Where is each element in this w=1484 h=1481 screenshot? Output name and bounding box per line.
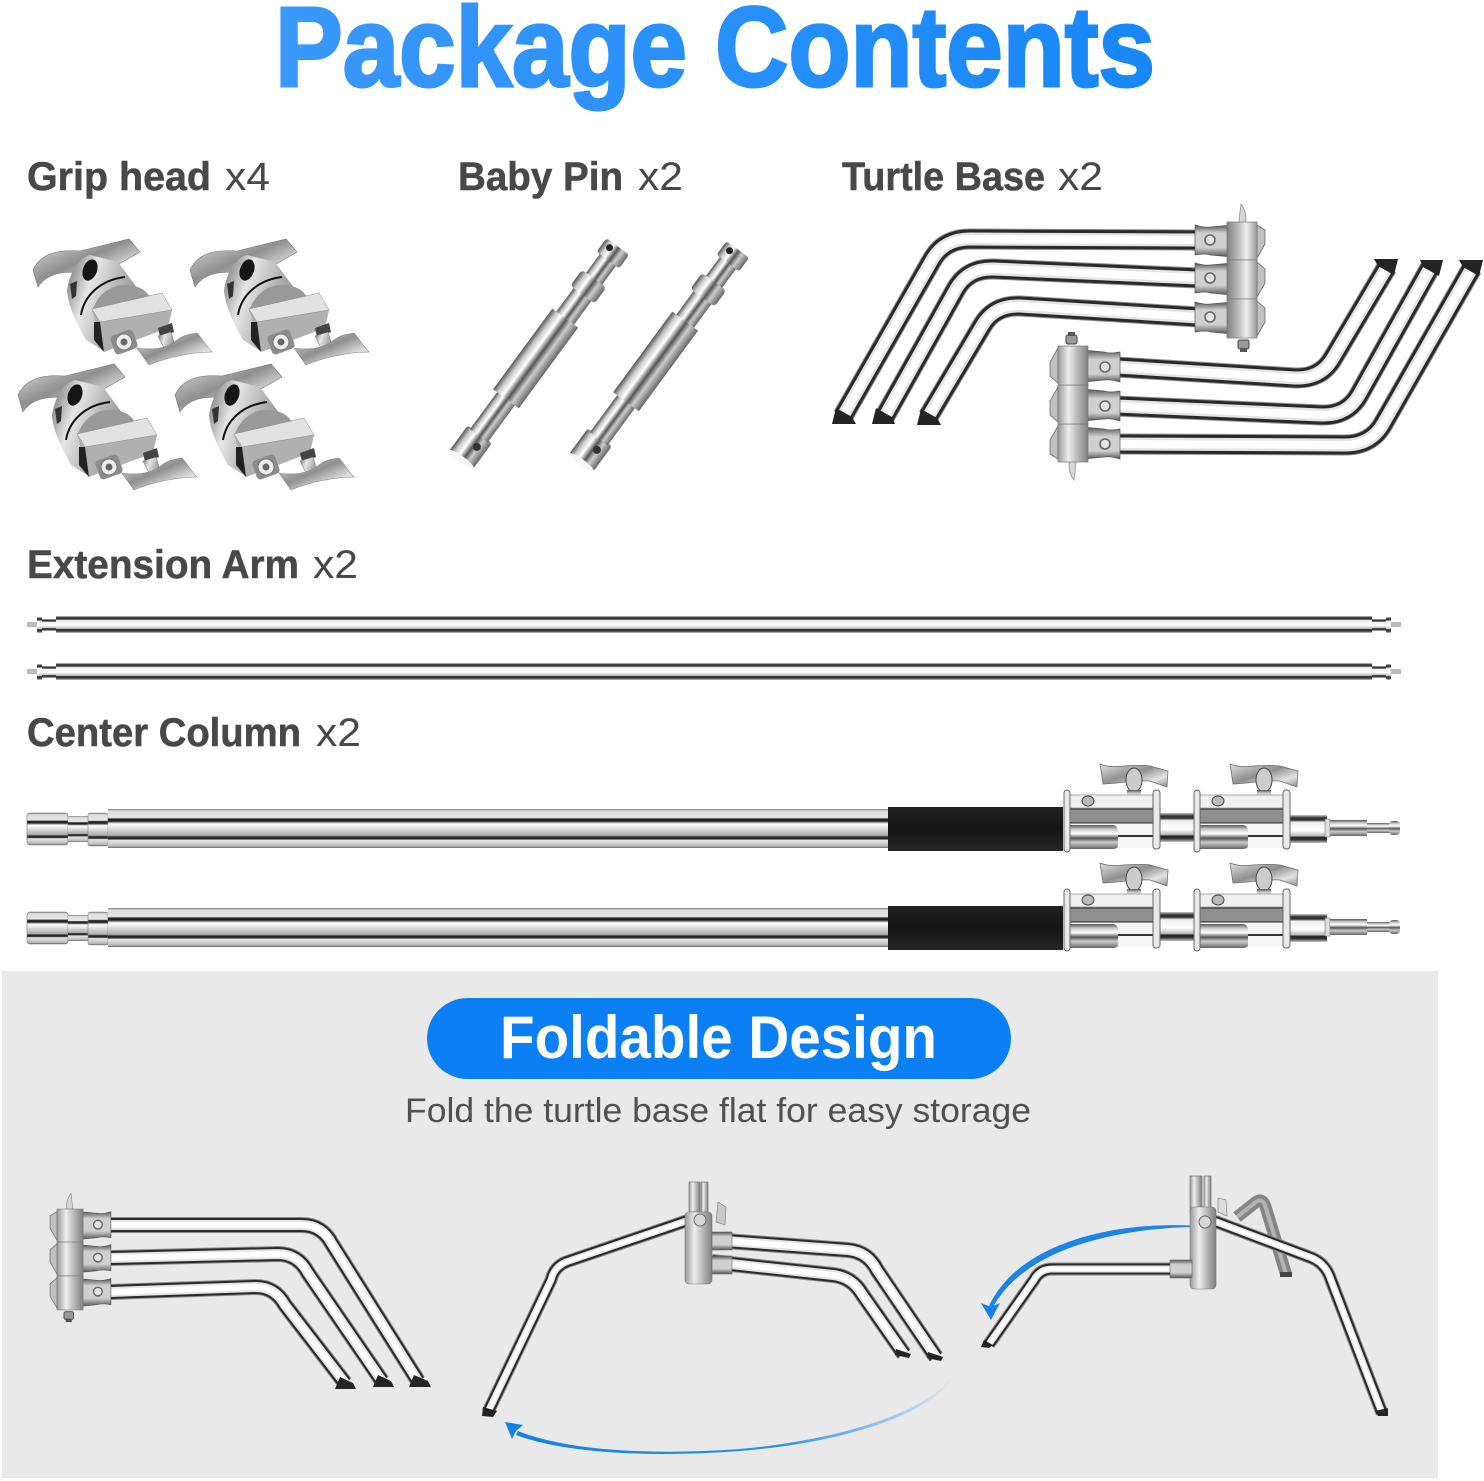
badge: foldable design: Foldable Design — [500, 1004, 937, 1071]
icon: stand with one leg being folded — [981, 1176, 1388, 1416]
heading: turtle base: Turtle Base — [842, 155, 1045, 199]
icon: baby pin 1 — [447, 237, 631, 471]
panel background — [2, 971, 1438, 1478]
icon: turtle base 1 — [832, 204, 1265, 425]
icon: grip head 1 — [33, 239, 212, 365]
heading: extension arm: Extension Arm — [27, 543, 299, 587]
heading: baby pin: x2 — [638, 155, 683, 199]
icon: grip head 3 — [18, 364, 197, 490]
icon: grip head 2 — [190, 239, 369, 365]
icon: folded turtle base — [50, 1193, 431, 1389]
heading: baby pin: Baby Pin — [458, 155, 623, 199]
heading: center column: Center Column — [27, 711, 301, 755]
heading: extension arm: x2 — [313, 543, 358, 587]
badge: foldable design — [427, 998, 1011, 1079]
icon: center column 2 — [27, 863, 1400, 951]
icon: grip head 4 — [175, 364, 354, 490]
heading: grip head: Grip head — [27, 155, 211, 199]
panel: foldable design — [2, 971, 1438, 1478]
icon: baby pin 2 — [567, 240, 751, 474]
icon: center column 1 — [27, 764, 1400, 852]
subtitle: Fold the turtle base flat for easy storage — [405, 1092, 1031, 1130]
icon: turtle base 2 — [1050, 259, 1483, 480]
heading: center column: x2 — [316, 711, 361, 755]
icon: extension arm 1 — [27, 616, 1401, 633]
arrow: swing left leg — [505, 1373, 955, 1454]
icon: stand with two legs folded — [482, 1182, 943, 1417]
heading: turtle base: x2 — [1058, 155, 1103, 199]
icon: extension arm 2 — [27, 663, 1401, 680]
heading: grip head: x4 — [225, 155, 270, 199]
arrow: fold rear leg — [981, 1225, 1190, 1320]
